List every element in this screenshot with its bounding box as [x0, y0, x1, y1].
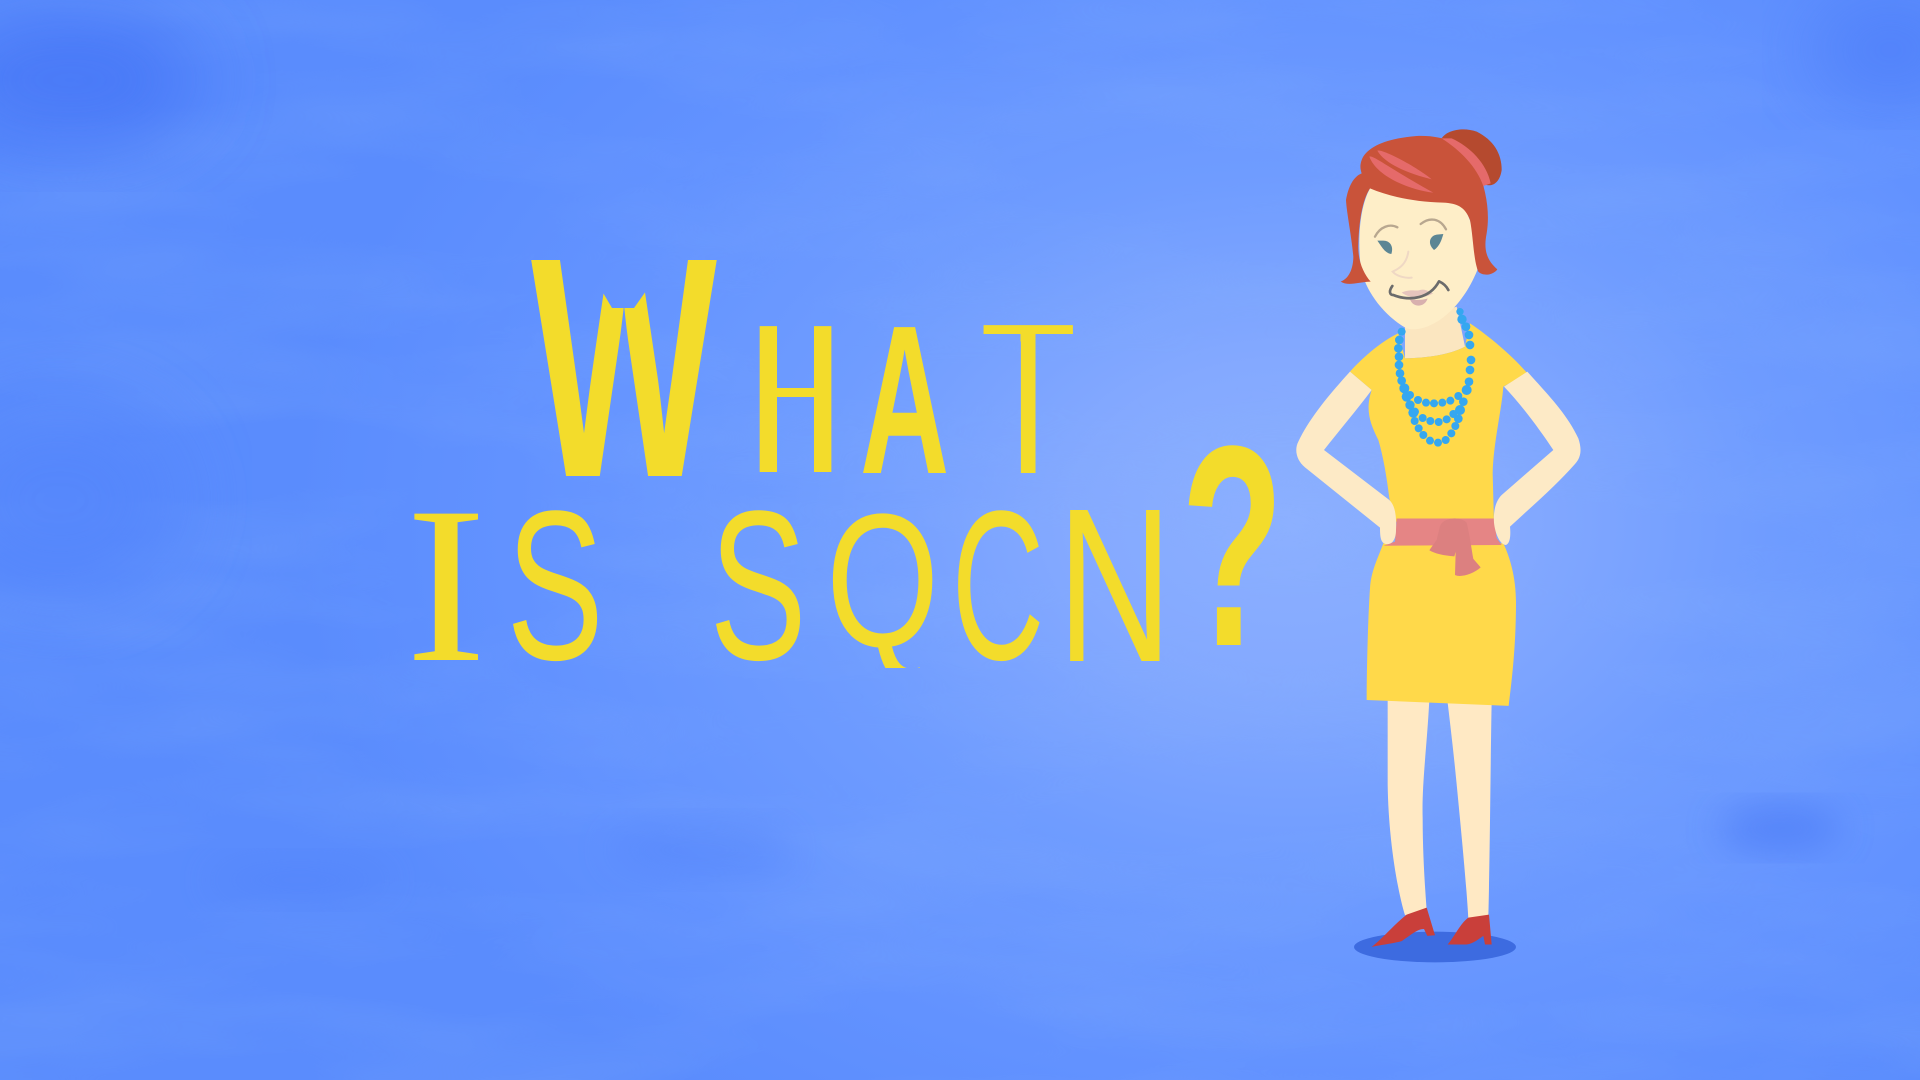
title line: What: H	[752, 280, 840, 517]
character: woman in yellow dress	[1296, 129, 1581, 962]
red shoes	[1372, 908, 1492, 947]
title line: is SQCN?: Q	[826, 474, 939, 686]
blue bead necklace	[1394, 308, 1475, 447]
face	[1359, 188, 1477, 329]
title line: What: A	[860, 281, 949, 518]
title line: is SQCN?: C	[952, 468, 1044, 705]
title line: is SQCN?: I	[406, 462, 487, 709]
arms	[1296, 372, 1581, 545]
smile	[1390, 281, 1448, 306]
hair bun	[1442, 129, 1502, 185]
title line: is SQCN?: S	[506, 467, 604, 704]
red hair	[1341, 136, 1497, 284]
hair highlights	[1369, 150, 1433, 193]
yellow dress	[1350, 323, 1527, 706]
title line: is SQCN?: N	[1057, 462, 1173, 708]
hair band	[1442, 138, 1491, 186]
title line: What	[531, 192, 1077, 543]
title: What is SQCN?	[406, 192, 1284, 709]
pink belt	[1383, 518, 1502, 576]
ground shadow	[1354, 932, 1516, 962]
belt knot	[1429, 518, 1481, 576]
title line: is SQCN?	[406, 386, 1284, 709]
title line: What: T	[980, 278, 1077, 519]
title line: is SQCN?: S	[709, 467, 807, 704]
title line: is SQCN?: ?	[1181, 386, 1284, 706]
title line: What: W	[531, 192, 719, 543]
eyebrows	[1375, 220, 1446, 237]
legs	[1388, 698, 1492, 919]
eyes	[1377, 234, 1443, 254]
neck	[1405, 307, 1465, 358]
nose	[1393, 252, 1412, 278]
